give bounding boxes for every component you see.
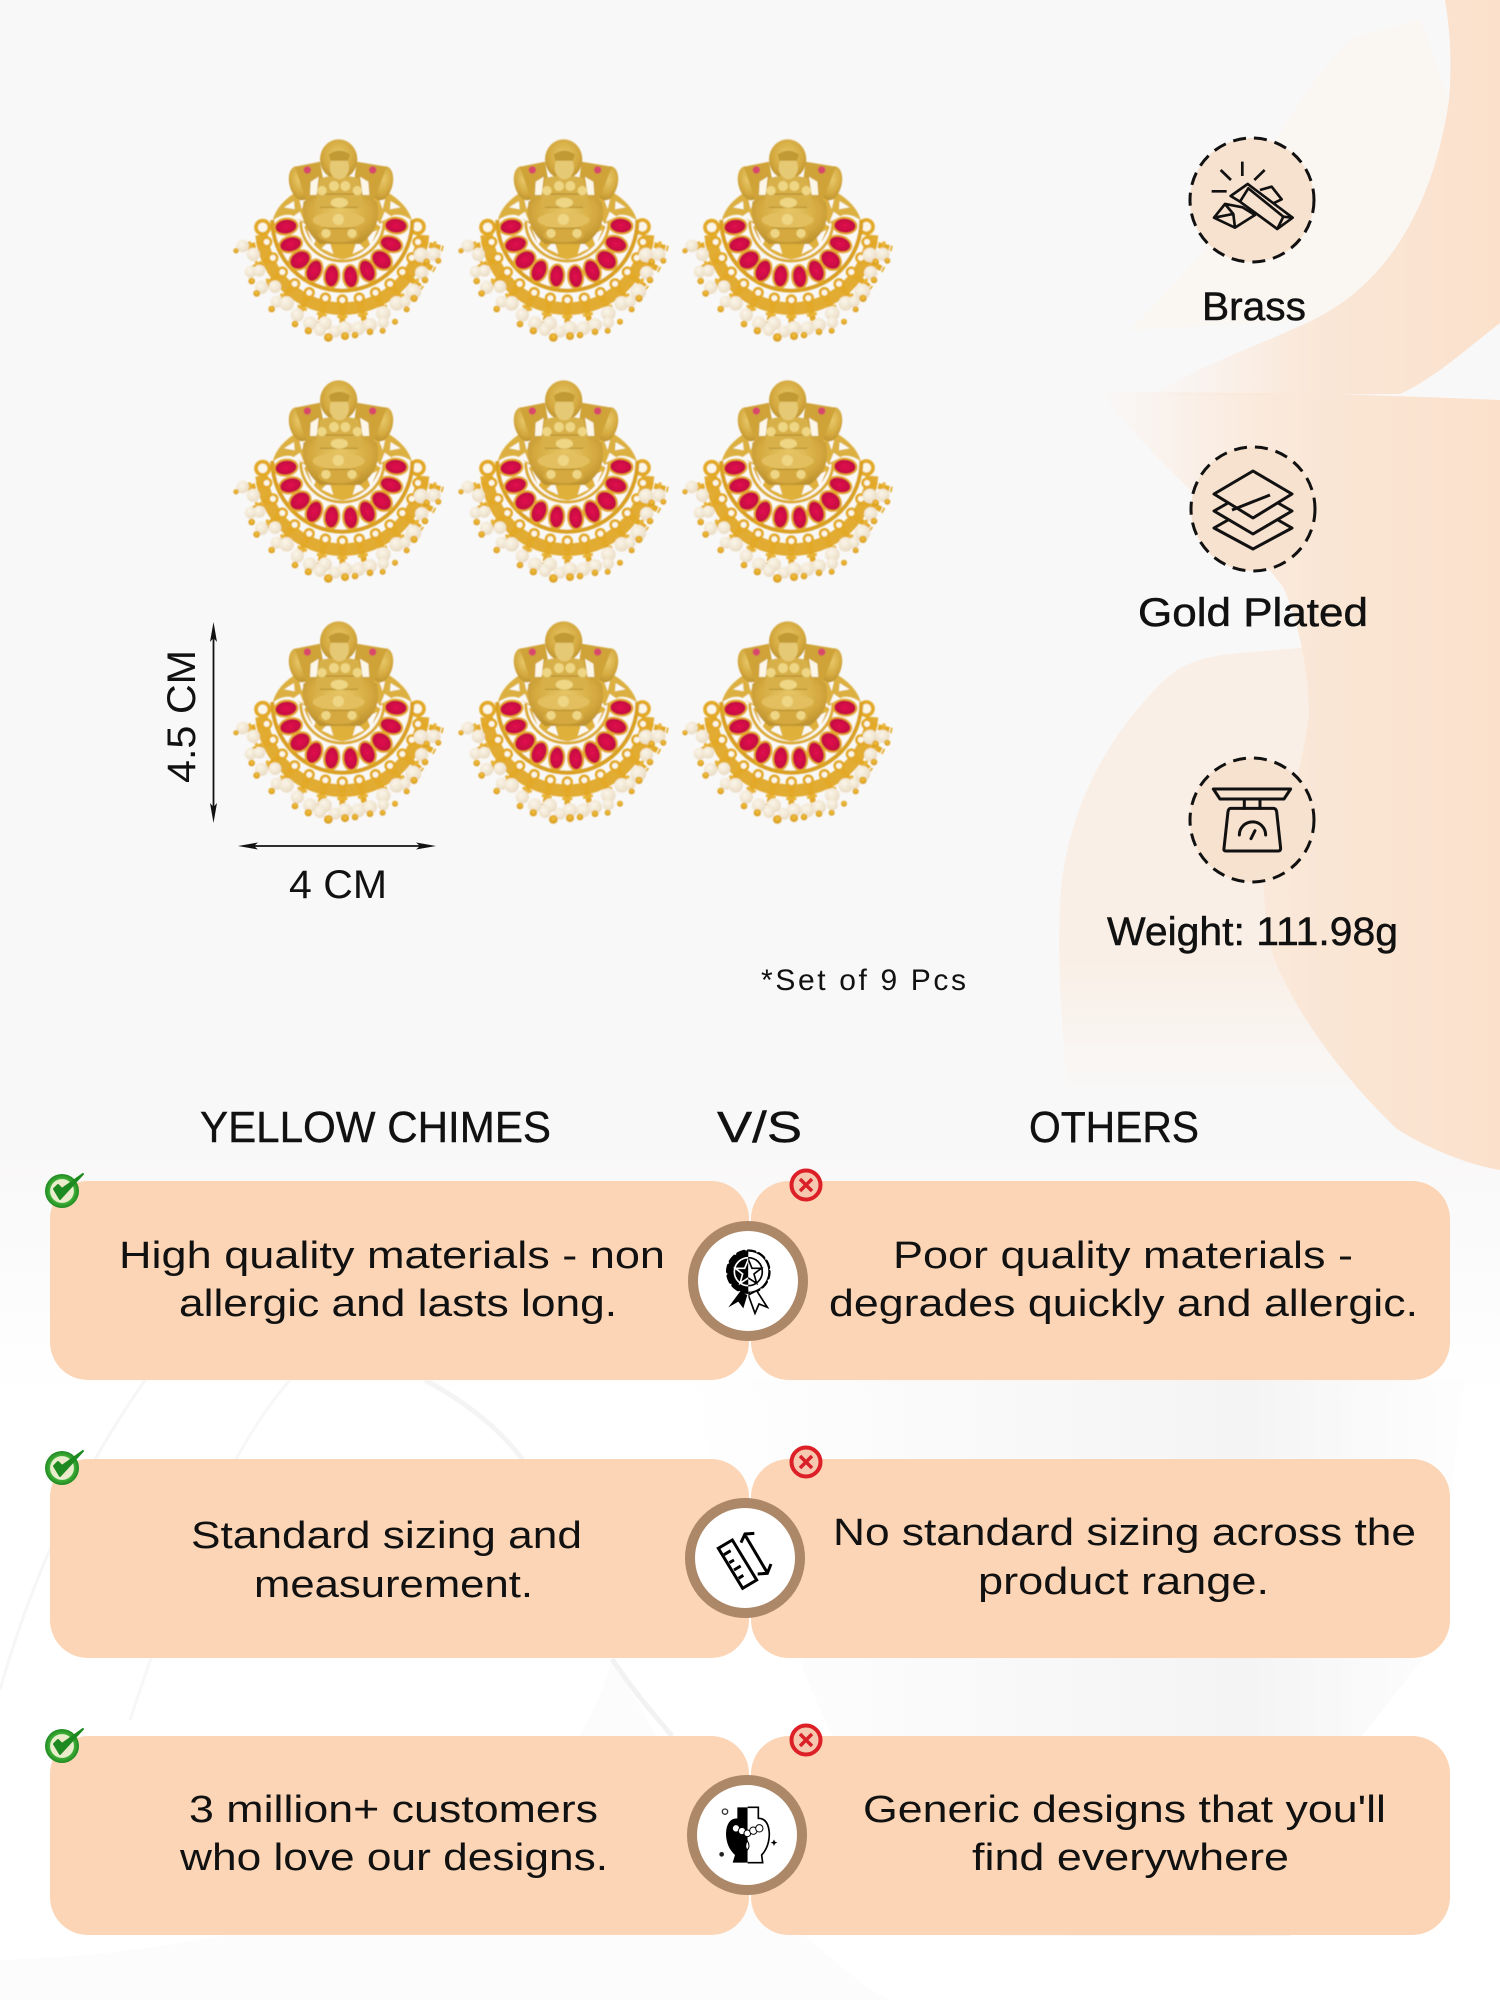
heading: versus: V/S bbox=[717, 1103, 802, 1152]
icon: check bbox=[45, 1451, 83, 1485]
comparison row 1 bbox=[45, 1170, 1450, 1380]
panel: others materials: degrades quickly and allergic. bbox=[829, 1283, 1418, 1325]
icon: check bbox=[45, 1729, 83, 1763]
panel: others sizing: product range. bbox=[978, 1561, 1269, 1603]
panel: yellow chimes sizing: Standard sizing and bbox=[191, 1515, 582, 1557]
label: width: 4 CM bbox=[289, 863, 387, 907]
icon: layers bbox=[1191, 447, 1315, 571]
label: brass: Brass bbox=[1202, 285, 1306, 329]
arrow: height dimension bbox=[210, 622, 217, 823]
panel: yellow chimes materials: allergic and lasts long. bbox=[179, 1283, 617, 1325]
icon: kitchen scale bbox=[1190, 758, 1314, 882]
label: weight: Weight: 111.98g bbox=[1107, 910, 1398, 954]
earring row 3 bbox=[233, 621, 893, 824]
panel: yellow chimes sizing: measurement. bbox=[254, 1564, 533, 1606]
label: gold plated: Gold Plated bbox=[1138, 591, 1368, 635]
feature: brass bbox=[1190, 138, 1314, 329]
earring row 1 bbox=[233, 139, 893, 342]
icon: cross bbox=[792, 1726, 820, 1754]
feature: gold plated bbox=[1138, 447, 1368, 635]
earring row 2 bbox=[233, 380, 893, 583]
heading: others: OTHERS bbox=[1029, 1103, 1199, 1152]
arrow: width dimension bbox=[238, 842, 436, 850]
panel: others designs bbox=[751, 1736, 1450, 1935]
panel: yellow chimes customers bbox=[50, 1736, 749, 1935]
icon: cross bbox=[792, 1170, 820, 1200]
panel: yellow chimes customers: 3 million+ customers bbox=[189, 1789, 598, 1831]
icon: cross bbox=[792, 1448, 820, 1476]
panel: yellow chimes sizing bbox=[50, 1459, 749, 1658]
panel: others materials bbox=[751, 1181, 1450, 1380]
label: height: 4.5 CM bbox=[160, 650, 204, 783]
panel: others sizing: No standard sizing across the bbox=[833, 1512, 1416, 1554]
panel: yellow chimes materials bbox=[50, 1181, 749, 1380]
icon: check bbox=[45, 1174, 83, 1208]
comparison row 2 bbox=[45, 1448, 1450, 1658]
note: set of pieces: *Set of 9 Pcs bbox=[761, 964, 966, 997]
panel: yellow chimes customers: who love our designs. bbox=[179, 1837, 608, 1879]
icon: necklace on bust bbox=[692, 1780, 802, 1890]
comparison row 3 bbox=[45, 1726, 1450, 1935]
feature: weight bbox=[1107, 758, 1398, 954]
panel: others materials: Poor quality materials - bbox=[893, 1235, 1353, 1277]
panel: others sizing bbox=[751, 1459, 1450, 1658]
panel: yellow chimes materials: High quality materials - non bbox=[119, 1235, 665, 1277]
icon: quality badge bbox=[693, 1226, 803, 1336]
heading: yellow chimes: YELLOW CHIMES bbox=[200, 1103, 551, 1152]
panel: others designs: Generic designs that you'll bbox=[863, 1789, 1386, 1831]
product grid: nine earrings bbox=[233, 139, 893, 824]
icon: gold bars bbox=[1190, 138, 1314, 262]
panel: others designs: find everywhere bbox=[972, 1837, 1289, 1879]
icon: ruler and arrows bbox=[690, 1503, 800, 1613]
